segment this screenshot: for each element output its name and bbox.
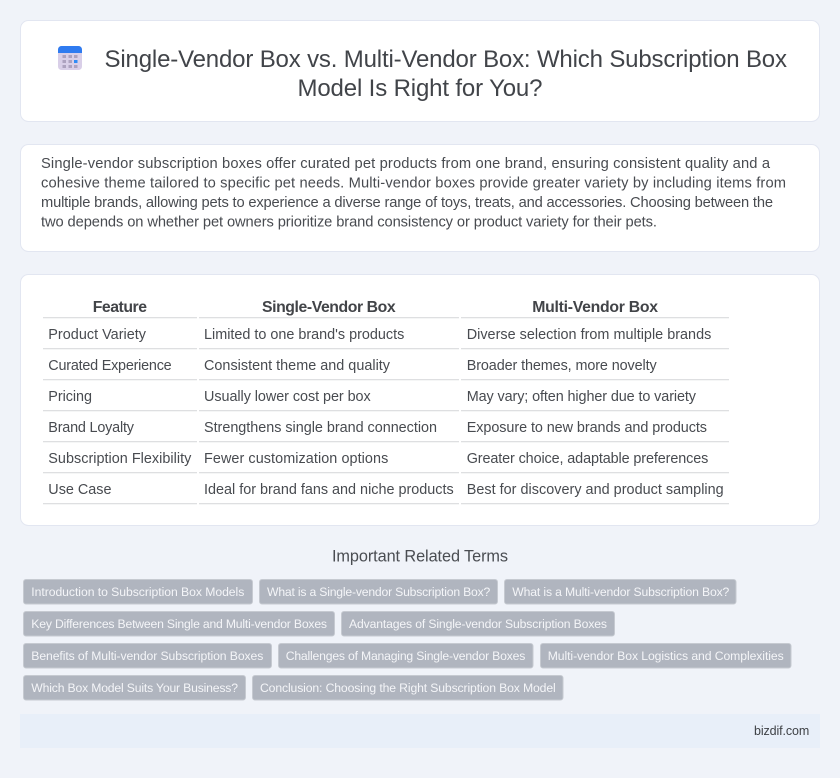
tag: [24, 644, 272, 668]
table row: Brand Loyalty: [48, 420, 707, 436]
title: Model Is Right for You?: [298, 75, 542, 102]
table row: Pricing: May vary; often higher due to variety: [467, 389, 697, 405]
table header: [93, 299, 658, 316]
table row: Subscription Flexibility: Fewer customization options: [204, 451, 388, 467]
table row: Curated Experience: Curated Experience: [48, 358, 172, 374]
tag: Benefits of Multi-vendor Subscription Boxes: [31, 649, 263, 663]
tag: [252, 676, 563, 700]
table row: Curated Experience: [48, 358, 657, 374]
heading: important related terms: Important Related Terms: [332, 548, 508, 566]
footer: [20, 714, 820, 748]
title: [104, 46, 787, 102]
panel: introduction: [20, 144, 820, 252]
panel: comparison table: [20, 274, 820, 526]
table row: Use Case: Use Case: [48, 482, 111, 498]
footer: bizdif.com: [754, 724, 809, 738]
tag: Introduction to Subscription Box Models: [31, 585, 244, 599]
text block: introduction paragraph: Single-vendor subscription boxes offer curated pet products from one brand, ensuring consistent quality and a: [41, 156, 771, 172]
panel: title header: [20, 20, 820, 122]
table row: Pricing: [48, 389, 697, 405]
tag: [278, 644, 533, 668]
table row: Pricing: Pricing: [48, 389, 92, 405]
text block: introduction paragraph: two depends on whether pet owners prioritize brand consistency or product variety for their pets.: [41, 214, 657, 230]
table row: Subscription Flexibility: Greater choice, adaptable preferences: [467, 451, 708, 467]
table row: Product Variety: Limited to one brand's products: [204, 327, 404, 343]
tag: [24, 612, 334, 636]
tag: What is a Single-vendor Subscription Box?: [267, 585, 491, 599]
table row: Brand Loyalty: Brand Loyalty: [48, 420, 135, 436]
table row: Product Variety: [48, 327, 711, 343]
tag: Which Box Model Suits Your Business?: [31, 681, 238, 695]
table header: Multi-Vendor Box: [532, 299, 658, 316]
tag: What is a Multi-vendor Subscription Box?: [512, 585, 730, 599]
table row: Curated Experience: Consistent theme and quality: [204, 358, 391, 374]
text block: introduction paragraph: [41, 156, 786, 230]
table row: Brand Loyalty: Exposure to new brands and products: [467, 420, 707, 436]
tag: Multi-vendor Box Logistics and Complexities: [548, 649, 784, 663]
table row: Use Case: Ideal for brand fans and niche products: [204, 482, 454, 498]
table row: Brand Loyalty: Strengthens single brand connection: [204, 420, 437, 436]
table header: Single-Vendor Box: [262, 299, 396, 316]
table row: Product Variety: Diverse selection from multiple brands: [467, 327, 711, 343]
table row: Use Case: Best for discovery and product sampling: [467, 482, 724, 498]
tag: [342, 612, 614, 636]
table header: Feature: [93, 299, 147, 316]
tag: Challenges of Managing Single-vendor Boxes: [286, 649, 525, 663]
tag: Conclusion: Choosing the Right Subscription Box Model: [260, 681, 556, 695]
table row: Curated Experience: Broader themes, more novelty: [467, 358, 657, 374]
table row: Use Case: [48, 482, 724, 498]
table row: Product Variety: Product Variety: [48, 327, 147, 343]
icon: calendar: [58, 46, 82, 70]
tag: [504, 580, 736, 604]
table row: Subscription Flexibility: [48, 451, 708, 467]
text block: introduction paragraph: cohesive theme tailored to specific pet needs. Multi-vendor boxes provide greater variety by including items from: [41, 176, 786, 192]
tag: Advantages of Single-vendor Subscription Boxes: [349, 617, 607, 631]
table row: Pricing: Usually lower cost per box: [204, 389, 371, 405]
tag: [24, 676, 246, 700]
panel: related term tags: [24, 580, 791, 700]
text block: introduction paragraph: multiple brands, allowing pets to experience a diverse range of toys, treats, and accessories. Choosing between the: [41, 195, 773, 211]
title: Single-Vendor Box vs. Multi-Vendor Box: Which Subscription Box: [104, 46, 787, 73]
tag: [24, 580, 252, 604]
tag: [540, 644, 791, 668]
tag: Key Differences Between Single and Multi-vendor Boxes: [31, 617, 327, 631]
tag: [260, 580, 498, 604]
table row: Subscription Flexibility: Subscription Flexibility: [48, 451, 192, 467]
